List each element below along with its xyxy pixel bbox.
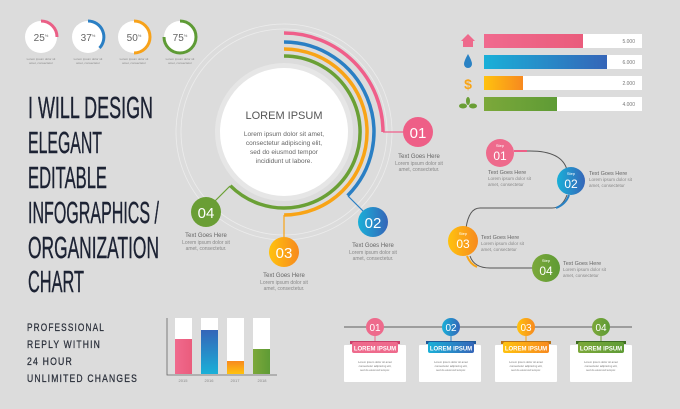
- node 03: [260, 237, 309, 292]
- node 01: Lorem ipsum dolor sit: [395, 161, 444, 167]
- node 02: Text Goes Here: [352, 243, 395, 249]
- timeline item 02: consectetur adipiscing elit,: [435, 364, 468, 368]
- horizontal bar chart: 2.000: [622, 81, 635, 87]
- donut 50: [118, 21, 150, 65]
- icon: dollar: $: [464, 76, 472, 92]
- node 04: [182, 197, 231, 252]
- arcs: [284, 33, 383, 132]
- horizontal bar chart: 6.000: [622, 60, 635, 66]
- donut 50: amet, consectetur: [122, 61, 146, 65]
- node 04: amet, consectetur.: [186, 246, 226, 252]
- timeline item 01: consectetur adipiscing elit,: [359, 364, 392, 368]
- title: ELEGANT: [28, 125, 102, 160]
- node 04: Text Goes Here: [185, 233, 228, 239]
- timeline item 01: Lorem ipsum dolor sit amet: [358, 360, 392, 364]
- node 01: 01: [410, 125, 426, 142]
- node 02: 02: [365, 215, 381, 232]
- donut 75: %: [184, 33, 188, 38]
- title: I WILL DESIGN: [28, 90, 153, 125]
- node 02: amet, consectetur.: [353, 256, 393, 262]
- node 03: amet, consectetur.: [264, 286, 304, 292]
- donut 50: Lorem ipsum dolor sit: [120, 57, 148, 61]
- node 03: Text Goes Here: [263, 273, 306, 279]
- node 02: Lorem ipsum dolor sit: [349, 250, 398, 256]
- step 04: Lorem ipsum dolor sit: [563, 267, 607, 272]
- percent donuts: [25, 21, 196, 65]
- column chart: [167, 318, 277, 383]
- step 03: amet, consectetur: [481, 247, 517, 252]
- timeline item 03: LOREM IPSUM: [505, 346, 547, 352]
- step 02: Step: [567, 171, 576, 176]
- timeline: [344, 318, 632, 382]
- subtitle: REPLY WITHIN: [27, 339, 101, 351]
- donut 25: amet, consectetur: [29, 61, 53, 65]
- timeline item 02: Lorem ipsum dolor sit amet: [434, 360, 468, 364]
- center circle: [220, 68, 348, 196]
- step 04: Step: [542, 258, 551, 263]
- step 01: [486, 139, 532, 187]
- timeline item 04: 04: [595, 323, 607, 334]
- step 02: Text Goes Here: [589, 171, 627, 177]
- donut 25: %: [45, 33, 49, 38]
- step 01: Step: [496, 143, 505, 148]
- donut 75: Lorem ipsum dolor sit: [166, 57, 194, 61]
- subtitle: PROFESSIONAL: [27, 322, 105, 334]
- donut 37: 37: [81, 33, 92, 44]
- title: ORGANIZATION: [28, 230, 159, 265]
- step 03: Step: [459, 231, 468, 236]
- timeline item 04: [570, 318, 632, 382]
- step 01: Text Goes Here: [488, 170, 526, 176]
- step 04: amet, consectetur: [563, 273, 599, 278]
- timeline item 01: sed do eiusmod tempor.: [360, 368, 390, 372]
- donut 75: 75: [173, 33, 184, 44]
- donut 37: %: [92, 33, 96, 38]
- timeline item 03: sed do eiusmod tempor.: [511, 368, 541, 372]
- timeline item 03: [495, 318, 557, 382]
- donut 37: Lorem ipsum dolor sit: [74, 57, 102, 61]
- icon: drop: [464, 54, 472, 68]
- step 03: Text Goes Here: [481, 235, 519, 241]
- title: EDITABLE: [28, 160, 107, 195]
- donut 75: amet, consectetur: [168, 61, 192, 65]
- timeline item 02: [419, 318, 481, 382]
- donut 75: [164, 21, 196, 65]
- subtitle: UNLIMITED CHANGES: [27, 373, 138, 385]
- column chart: 2018: [258, 378, 267, 383]
- timeline item 03: 03: [520, 323, 532, 334]
- donut 25: [25, 21, 57, 65]
- timeline item 01: 01: [369, 323, 381, 334]
- center circle: Lorem ipsum dolor sit amet,: [244, 131, 324, 138]
- node 03: 03: [276, 245, 292, 262]
- horizontal bar chart: [459, 34, 642, 111]
- step 04: Text Goes Here: [563, 261, 601, 267]
- donut 37: [72, 21, 104, 65]
- circular chart: [176, 24, 444, 292]
- column chart: 2016: [205, 378, 214, 383]
- step 01: 01: [493, 149, 507, 163]
- step 01: amet, consectetur: [488, 182, 524, 187]
- donut 25: Lorem ipsum dolor sit: [27, 57, 56, 61]
- node 01: Text Goes Here: [398, 154, 441, 160]
- step 04: 04: [539, 264, 553, 278]
- column chart: 2017: [231, 378, 240, 383]
- step 02: [557, 167, 633, 195]
- horizontal bar chart: 5.000: [622, 39, 635, 45]
- timeline item 03: consectetur adipiscing elit,: [510, 364, 543, 368]
- step 03: [448, 226, 525, 256]
- step 02: amet, consectetur: [589, 183, 625, 188]
- node 04: Lorem ipsum dolor sit: [182, 240, 231, 246]
- donut 37: amet, consectetur: [76, 61, 100, 65]
- timeline item 01: LOREM IPSUM: [354, 346, 396, 352]
- title: [28, 90, 159, 299]
- step 03: Lorem ipsum dolor sit: [481, 241, 525, 246]
- node 04: 04: [198, 205, 214, 222]
- timeline item 04: Lorem ipsum dolor sit amet: [584, 360, 618, 364]
- subtitle: [27, 322, 138, 385]
- step path: [448, 139, 633, 282]
- timeline item 03: Lorem ipsum dolor sit amet: [509, 360, 543, 364]
- donut 25: 25: [34, 33, 45, 44]
- icon: plant: [459, 97, 477, 108]
- connectors: [214, 132, 405, 238]
- column chart: 2015: [179, 378, 188, 383]
- center circle: sed do eiusmod tempor: [250, 149, 319, 156]
- node 02: [349, 207, 398, 262]
- center circle: consectetur adipiscing elit,: [246, 140, 322, 147]
- step 02: Lorem ipsum dolor sit: [589, 177, 633, 182]
- timeline item 02: 02: [445, 323, 457, 334]
- title: INFOGRAPHICS /: [28, 195, 159, 230]
- icon: house: [461, 34, 475, 47]
- step 03: 03: [456, 237, 470, 251]
- timeline item 02: LOREM IPSUM: [430, 346, 472, 352]
- step 04: [532, 254, 607, 282]
- node 01: [395, 117, 444, 173]
- timeline item 04: sed do eiusmod tempor.: [586, 368, 616, 372]
- step 01: Lorem ipsum dolor sit: [488, 176, 532, 181]
- center circle: incididunt ut labore.: [256, 158, 312, 165]
- timeline item 01: [344, 318, 406, 382]
- subtitle: 24 HOUR: [27, 356, 73, 368]
- node 01: amet, consectetur.: [399, 167, 439, 173]
- center circle: LOREM IPSUM: [245, 110, 323, 122]
- horizontal bar chart: 4.000: [622, 102, 635, 108]
- timeline item 02: sed do eiusmod tempor.: [436, 368, 466, 372]
- donut 50: %: [138, 33, 142, 38]
- node 03: Lorem ipsum dolor sit: [260, 280, 309, 286]
- timeline item 04: LOREM IPSUM: [580, 346, 622, 352]
- title: CHART: [28, 264, 84, 299]
- donut 50: 50: [127, 33, 138, 44]
- step 02: 02: [564, 177, 578, 191]
- timeline item 04: consectetur adipiscing elit,: [585, 364, 618, 368]
